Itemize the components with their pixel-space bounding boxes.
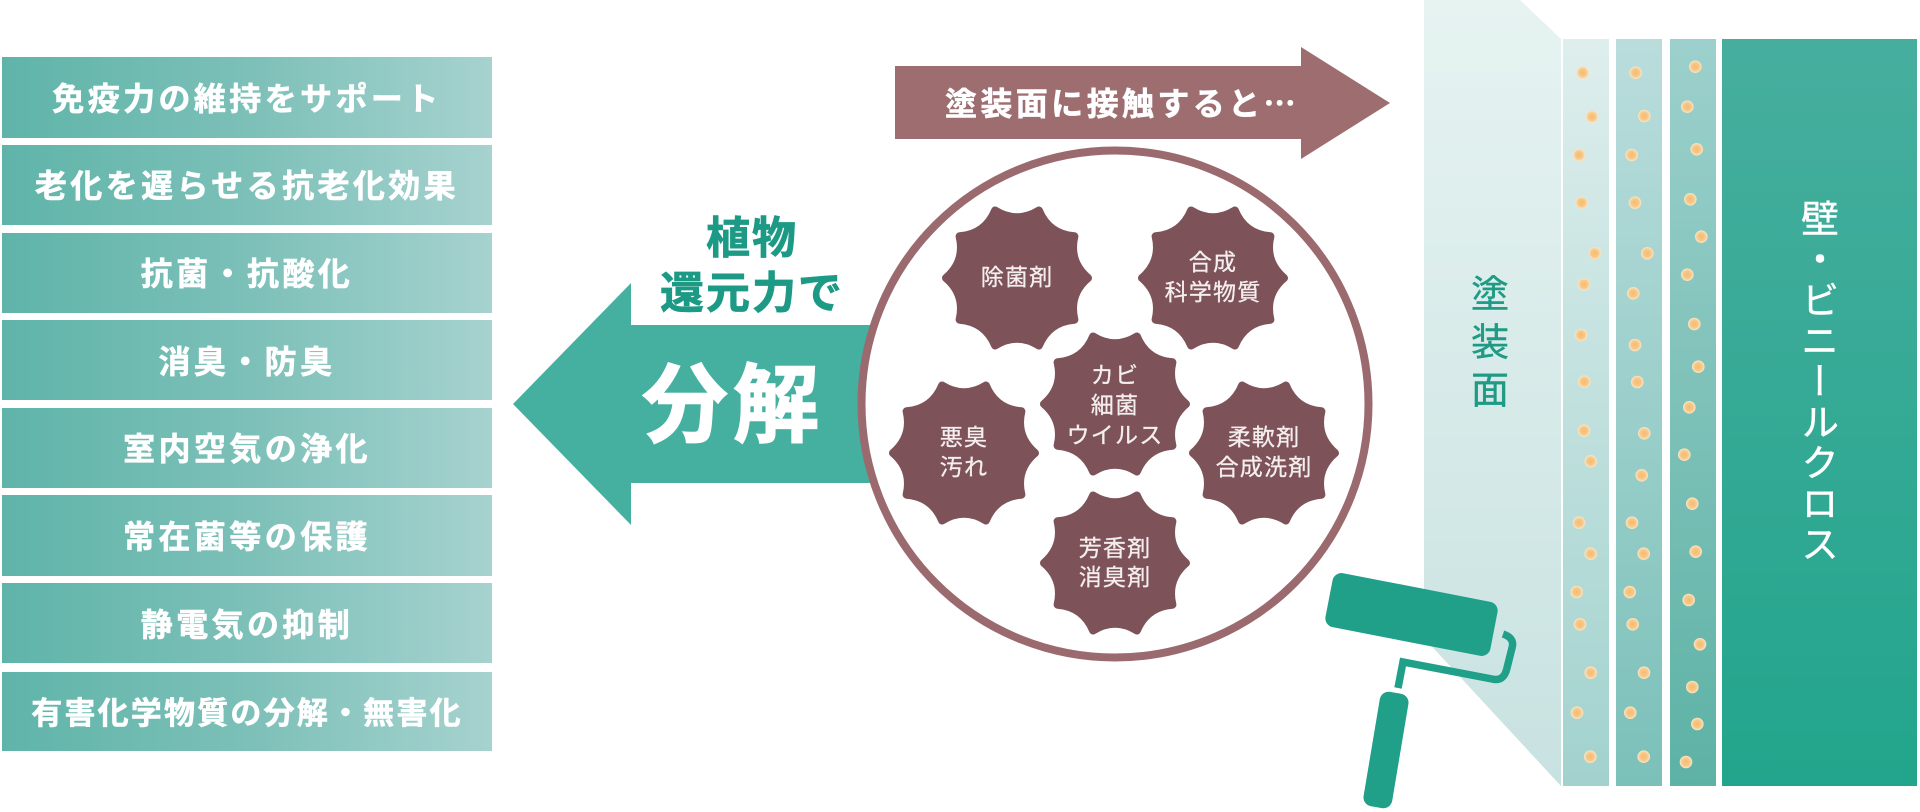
panel: benefit list	[2, 57, 492, 751]
star: 合成科学物質	[1142, 210, 1284, 346]
star: 悪臭汚れ: 汚れ	[940, 454, 988, 480]
heading: 植物還元力で	[660, 214, 844, 318]
panel: wall vinyl cloth	[1722, 39, 1917, 786]
benefit bar 2	[2, 145, 492, 225]
star: 悪臭汚れ: 悪臭	[940, 424, 988, 450]
benefit bar 4	[2, 320, 492, 400]
benefit bar 2: 老化を遅らせる抗老化効果	[35, 168, 459, 204]
icon: paint roller	[1324, 571, 1513, 810]
star: 合成科学物質: 合成	[1189, 249, 1237, 275]
panel: painted surface	[1424, 0, 1561, 786]
star: 柔軟剤合成洗剤	[1193, 386, 1335, 520]
benefit bar 5	[2, 408, 492, 488]
heading: 植物還元力で: 還元力で	[660, 269, 844, 318]
star: 悪臭汚れ	[893, 386, 1035, 520]
arrow label: 塗装面に接触すると…	[945, 79, 1299, 125]
label: 壁・ビニールクロス: 壁・ビニールクロス	[1794, 199, 1838, 565]
star: 芳香剤消臭剤: 消臭剤	[1079, 564, 1151, 590]
panel: contaminants circle	[862, 150, 1368, 658]
star: カビ細菌ウイルス: カビ	[1091, 362, 1139, 388]
benefit bar 3	[2, 233, 492, 313]
arrow: brown contact arrow	[895, 47, 1390, 159]
benefit bar 8: 有害化学物質の分解・無害化	[31, 696, 463, 731]
benefit bar 6: 常在菌等の保護	[123, 519, 371, 555]
star: カビ細菌ウイルス: 細菌	[1091, 392, 1139, 418]
label: 塗装面: 塗装面	[1464, 274, 1508, 418]
benefit bar 7	[2, 583, 492, 663]
layer strip 1 with particles	[1563, 39, 1609, 786]
arrow: green decomposition arrow	[513, 283, 880, 525]
star: 合成科学物質: 科学物質	[1165, 279, 1261, 305]
star: 芳香剤消臭剤	[1044, 496, 1186, 630]
star: カビ細菌ウイルス: ウイルス	[1067, 422, 1163, 448]
star: カビ細菌ウイルス	[1044, 336, 1186, 472]
star: 柔軟剤合成洗剤: 柔軟剤	[1228, 424, 1300, 450]
star: 除菌剤	[946, 210, 1088, 346]
benefit bar 5: 室内空気の浄化	[123, 431, 371, 467]
star: 芳香剤消臭剤: 芳香剤	[1079, 535, 1151, 561]
star: 除菌剤: 除菌剤	[981, 264, 1053, 290]
benefit bar 6	[2, 495, 492, 576]
arrow label: 分解: 分解	[642, 358, 824, 454]
benefit bar 4: 消臭・防臭	[158, 344, 336, 380]
benefit bar 8	[2, 672, 492, 751]
layer strip 2 with particles	[1616, 39, 1662, 786]
benefit bar 1	[2, 57, 492, 138]
benefit bar 1: 免疫力の維持をサポート	[52, 81, 442, 117]
benefit bar 3: 抗菌・抗酸化	[141, 256, 353, 292]
layer strip 3 with particles	[1670, 39, 1716, 786]
star: 柔軟剤合成洗剤: 合成洗剤	[1216, 454, 1312, 480]
heading: 植物還元力で: 植物	[706, 214, 798, 263]
benefit bar 7: 静電気の抑制	[141, 607, 353, 643]
